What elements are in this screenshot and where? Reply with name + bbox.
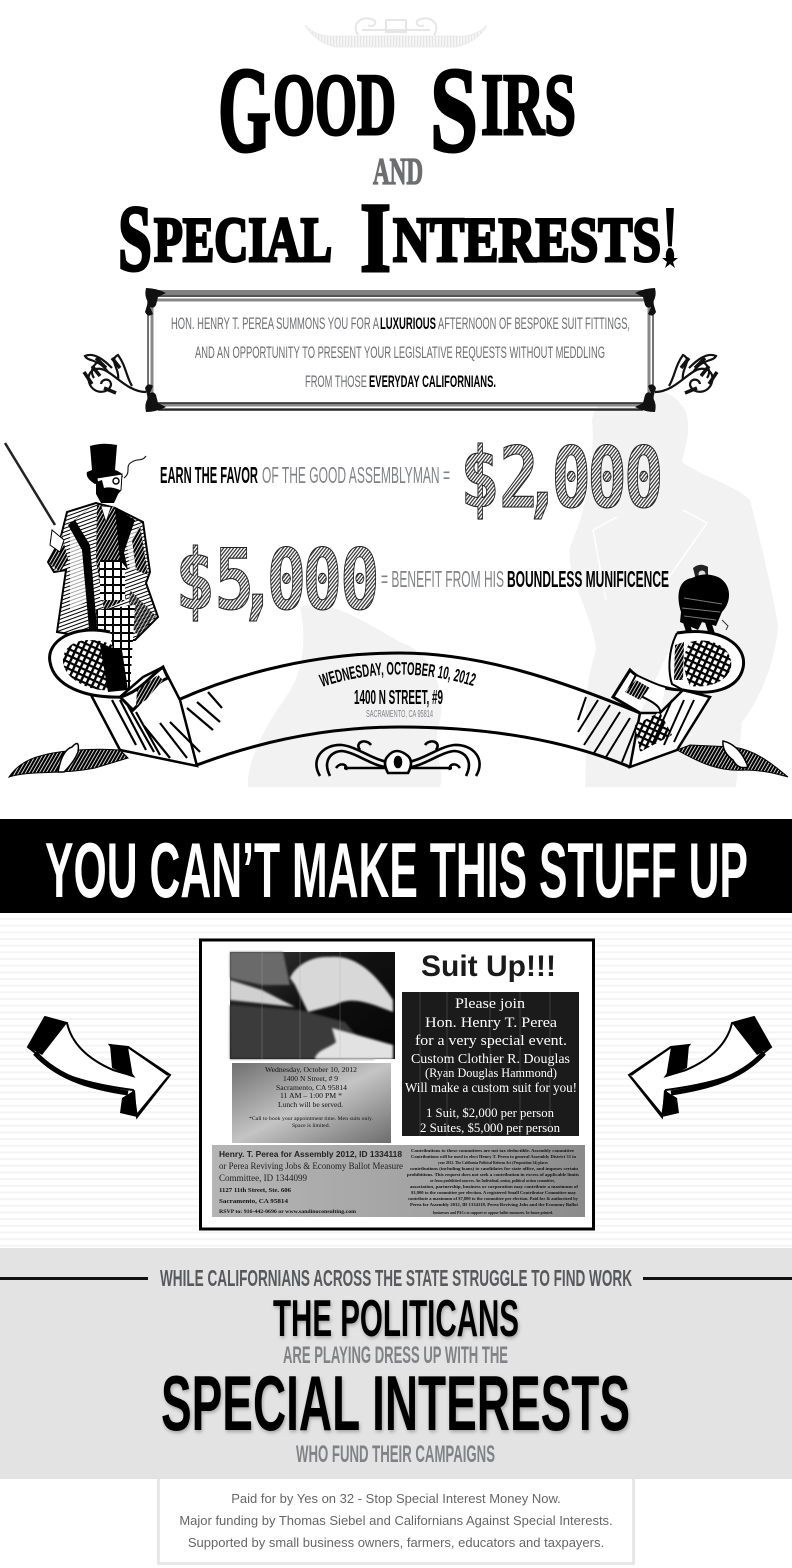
text: who fund their campaigns: WHO FUND THEIR CAMPAIGNS — [296, 1441, 495, 1468]
flyer committee bar: Sacramento, CA 95814 — [219, 1198, 289, 1205]
flyer committee bar: Contributions to these committees are not tax deductible. Assembly committee — [411, 1148, 574, 1153]
invitation text: AFTERNOON OF BESPOKE SUIT FITTINGS, — [438, 314, 630, 333]
title: Good Sirs: OOD — [273, 57, 396, 154]
text: earn the favor: EARN THE FAVOR — [160, 462, 258, 488]
flyer committee bar — [212, 1145, 585, 1217]
invitation text: LUXURIOUS — [380, 314, 436, 333]
left ribbon end — [9, 630, 222, 777]
flyer committee bar: contribute a maximum of $7,800 to the committee per election. Paid for & authorized by — [408, 1196, 579, 1201]
flyer details box: Space is limited. — [292, 1123, 331, 1129]
flyer invitation box: (Ryan Douglas Hammond) — [425, 1065, 557, 1080]
lapels and coat shading — [68, 503, 135, 640]
flyer committee bar: association, partnership, business or corporation may contribute a maximum of — [410, 1184, 579, 1189]
icon: smoke — [124, 456, 146, 478]
flyer invitation box: 1 Suit, $2,000 per person — [426, 1105, 554, 1120]
flyer invitation box: Will make a custom suit for you! — [405, 1081, 577, 1096]
flyer details box: Lunch will be served. — [278, 1100, 343, 1109]
icon: cane — [5, 443, 55, 525]
flyer committee bar: RSVP to: 916-442-0696 or www.sandinoconsulting.com — [219, 1209, 356, 1215]
title: Special Interests: S — [118, 187, 152, 291]
main band edges — [178, 653, 640, 713]
banner text: 1400 N STREET, #9 — [354, 687, 443, 709]
trousers — [96, 605, 135, 690]
title: Good Sirs: G — [218, 43, 271, 178]
text: the politicans: THE POLITICANS — [273, 1290, 519, 1348]
title: Special Interests: ! — [663, 191, 677, 278]
flyer details box: *Call to book your appointment time. Men suits only. — [249, 1116, 374, 1122]
banner text — [318, 662, 476, 720]
silhouette: background gentleman — [248, 388, 778, 787]
illustration: stout gentleman — [679, 565, 729, 634]
flyer title: Suit Up!!! — [421, 950, 556, 983]
title: Good Sirs — [218, 43, 576, 178]
flyer invitation box — [402, 992, 579, 1136]
invitation text: HON. HENRY T. PEREA SUMMONS YOU FOR A — [171, 314, 379, 333]
flyer details box: Wednesday, October 10, 2012 — [265, 1065, 357, 1074]
panel: closing message — [0, 1248, 792, 1479]
panel: paid-for-by footer: Supported by small business owners, farmers, educators and taxpayers. — [188, 1535, 604, 1550]
divider left — [0, 1277, 148, 1280]
title: Special Interests: NTERESTS — [393, 204, 661, 275]
coat — [48, 503, 158, 640]
banner text: SACRAMENTO, CA 95814 — [366, 709, 433, 720]
panel: headline band — [0, 819, 792, 914]
flyer committee bar: $3,900 to the committee per election. A registered Small Contributor Committee may — [411, 1190, 577, 1195]
panel: paid-for-by footer — [158, 1479, 634, 1564]
flyer committee bar: year 2012. The California Political Reform Act (Proposition 34) places — [438, 1160, 548, 1165]
flyer committee bar: or Perea Reviving Jobs & Economy Ballot Measure — [219, 1161, 403, 1171]
invitation text — [171, 314, 630, 391]
flyer committee bar: contributions (including loans) to candidates for state office, and imposes certain — [410, 1166, 579, 1171]
divider right — [643, 1277, 792, 1280]
flyer committee bar: Contributions will be used to elect Henry T. Perea to general Assembly District 31 in — [411, 1154, 577, 1159]
flyer committee bar: 1127 11th Street, Ste. 606 — [219, 1187, 292, 1194]
flyer photo — [230, 952, 395, 1059]
text: benefit from his boundless munificence: = BENEFIT FROM HIS — [381, 566, 504, 592]
invitation text: EVERYDAY CALIFORNIANS. — [369, 372, 496, 391]
number: $5,000: $5,000 — [175, 531, 380, 629]
title: Special Interests: PECIAL — [154, 204, 332, 275]
flyer details box: Sacramento, CA 95814 — [276, 1083, 347, 1092]
flyer invitation box: Hon. Henry T. Perea — [425, 1015, 557, 1031]
text: are playing dress up: ARE PLAYING DRESS UP WITH THE — [283, 1342, 508, 1369]
panel: paid-for-by footer: Major funding by Thomas Siebel and Californians Against Special Interests. — [179, 1513, 613, 1528]
icon: top ornament — [305, 18, 487, 47]
panel: invitation frame — [84, 288, 717, 412]
flyer details box — [232, 1063, 391, 1143]
title: Good Sirs: S — [430, 43, 478, 178]
flyer details box: 1400 N Street, # 9 — [283, 1074, 338, 1083]
panel: Suit Up flyer — [200, 940, 594, 1229]
flyer committee bar: Henry. T. Perea for Assembly 2012, ID 1334118 — [219, 1149, 402, 1159]
number: $2,000: $2,000 — [460, 429, 663, 527]
text: earn the favor: OF THE GOOD ASSEMBLYMAN = — [262, 462, 450, 488]
banner text: WEDNESDAY, OCTOBER 10, 2012 — [318, 662, 476, 686]
flyer committee bar: Committee, ID 1344099 — [219, 1173, 307, 1183]
panel: paid-for-by footer: Paid for by Yes on 32 - Stop Special Interest Money Now. — [231, 1491, 561, 1506]
text: earn the favor — [160, 462, 450, 488]
flyer invitation box: Please join — [455, 996, 526, 1012]
icon: right flourish — [655, 355, 717, 393]
face — [97, 474, 122, 500]
flyer committee bar: Perea for Assembly 2012, ID 1334118. Perea Reviving Jobs and the Economy Ballot — [410, 1202, 579, 1207]
invitation text: FROM THOSE — [305, 372, 367, 391]
flyer committee bar: businesses and PACs to support or oppose ballot measures. In-house printed. — [433, 1210, 553, 1215]
illustration: gentleman with cane — [5, 443, 158, 690]
icon: banner ornament — [316, 741, 480, 776]
title: and: AND — [373, 151, 423, 193]
illustration: ribbon banner — [8, 628, 788, 778]
flyer committee bar: or from prohibited sources. An Individual, union, political action committee, — [430, 1178, 555, 1183]
right ribbon end — [578, 632, 788, 777]
panel: striped background — [0, 913, 792, 1248]
icon: left flourish — [84, 355, 146, 393]
icon: frame corners — [145, 288, 656, 412]
flyer invitation box: Custom Clothier R. Douglas — [411, 1052, 570, 1067]
vest and shirt — [96, 505, 126, 610]
title: Special Interests: I — [360, 182, 391, 293]
icon: right arrow — [629, 1017, 771, 1117]
flyer details box: 11 AM – 1:00 PM * — [280, 1091, 342, 1100]
flyer committee bar: prohibitions. This request does not seek a contribution in excess of applicable limits — [407, 1172, 579, 1177]
icon: left arrow — [28, 1017, 170, 1117]
flyer invitation box: for a very special event. — [415, 1033, 567, 1049]
flyer invitation box: 2 Suites, $5,000 per person — [420, 1120, 560, 1135]
top hat — [87, 444, 123, 484]
coat highlights — [70, 530, 146, 610]
title: Good Sirs: IRS — [481, 57, 576, 154]
title: Special Interests — [118, 182, 678, 293]
